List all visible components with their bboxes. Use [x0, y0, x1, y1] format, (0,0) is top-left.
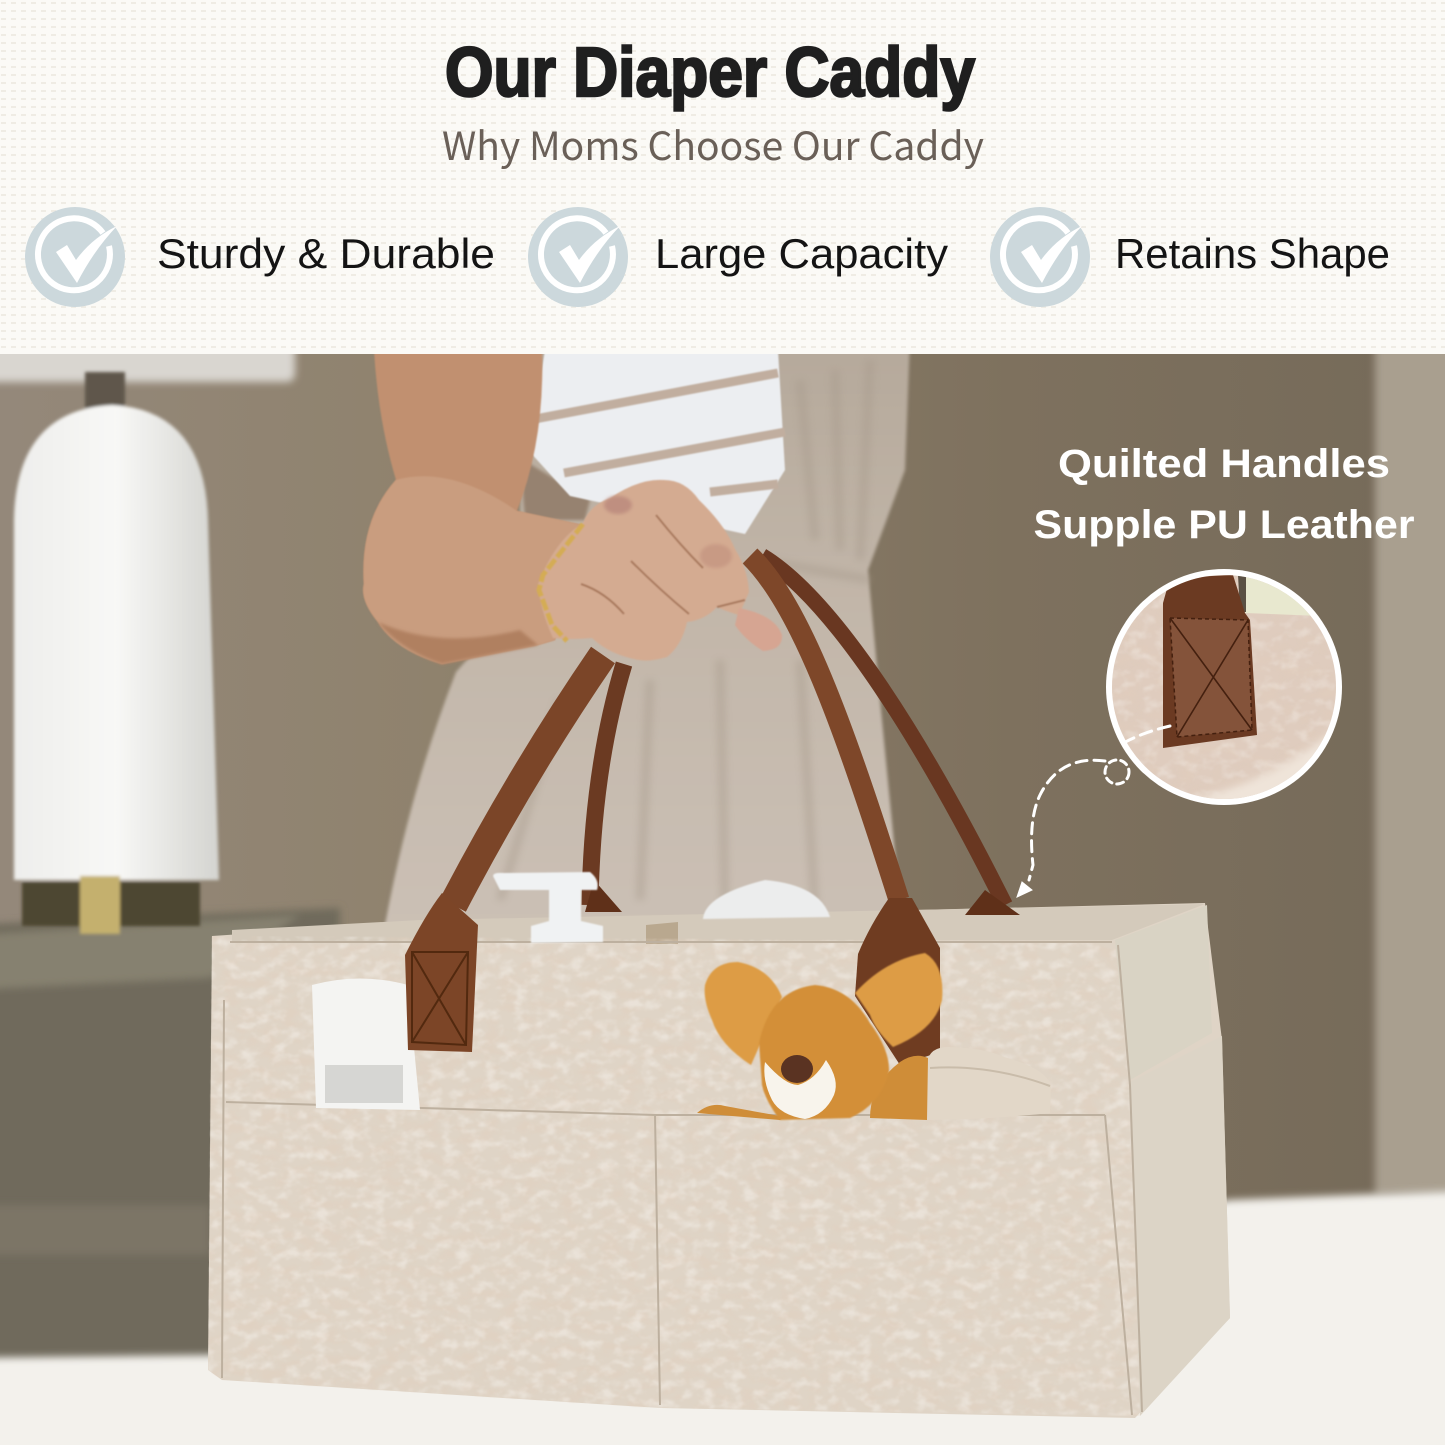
feature: retains shape — [990, 207, 1390, 307]
callout text: Supple PU Leather — [1034, 503, 1414, 547]
white tube — [312, 978, 420, 1110]
left handle tab — [405, 893, 478, 1052]
callout text: Quilted Handles — [1058, 442, 1390, 486]
feature: retains shape: Retains Shape — [1115, 230, 1390, 277]
fox ears — [705, 962, 782, 1065]
caddy — [208, 903, 1230, 1418]
header panel — [0, 0, 1445, 354]
right handle tab — [855, 898, 940, 1065]
shirt shadow — [520, 458, 590, 520]
lamp — [14, 372, 219, 934]
fox muzzle — [764, 1060, 836, 1119]
photo panel — [0, 330, 1445, 1445]
near leather handles — [405, 556, 1020, 1065]
felt texture — [208, 936, 1140, 1416]
towel roll — [927, 1048, 1042, 1119]
feature: sturdy and durable — [25, 207, 495, 307]
room background — [0, 330, 1445, 1445]
dress — [385, 340, 910, 925]
callout text — [1034, 442, 1414, 547]
feature: sturdy and durable: Sturdy & Durable — [157, 230, 495, 277]
icon: check badge — [990, 207, 1090, 307]
icon: check badge — [528, 207, 628, 307]
fox body and foot — [697, 1056, 928, 1120]
feature: large capacity: Large Capacity — [655, 230, 948, 277]
dashed arrow — [1017, 726, 1170, 897]
person — [363, 340, 910, 925]
plush fox — [697, 953, 1051, 1120]
caddy side panel — [1205, 905, 1208, 926]
caddy interior — [232, 904, 1205, 942]
feature: large capacity — [528, 207, 948, 307]
title: Our Diaper Caddy — [445, 33, 975, 111]
far handles — [585, 556, 1005, 912]
bottle and towel in caddy — [493, 872, 830, 943]
pocket seams — [222, 942, 1142, 1415]
icon: check badge — [25, 207, 125, 307]
fox head — [759, 985, 889, 1120]
hand — [538, 480, 782, 661]
inset circle: handle detail — [1106, 569, 1342, 805]
subtitle: Why Moms Choose Our Caddy — [442, 116, 984, 172]
arm — [363, 350, 583, 664]
shirt — [528, 350, 785, 534]
